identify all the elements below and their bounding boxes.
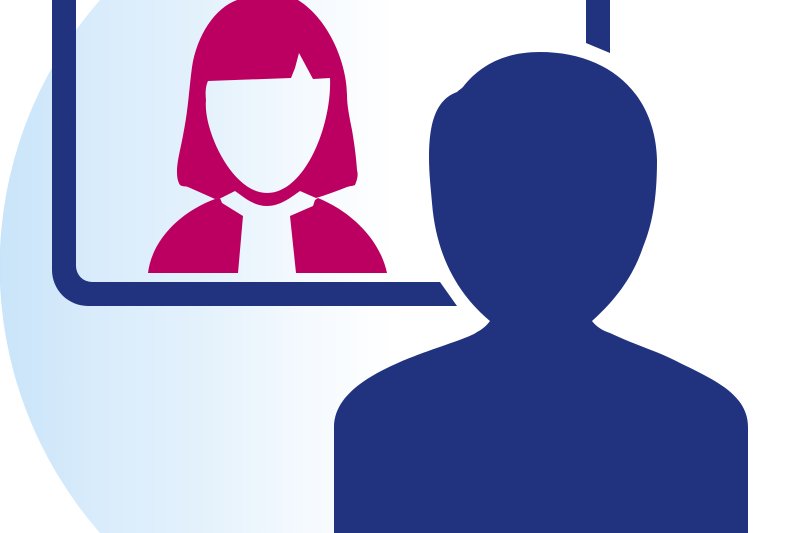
background circle: [0, 0, 400, 533]
frame right edge: [586, 0, 610, 53]
woman on screen: [148, 0, 387, 273]
frame left and bottom edge: [52, 0, 457, 306]
video screen frame: [52, 0, 610, 306]
woman hair: [177, 0, 358, 206]
man silhouette: [334, 52, 748, 533]
woman left shoulder: [148, 198, 243, 273]
woman right shoulder: [290, 198, 387, 273]
